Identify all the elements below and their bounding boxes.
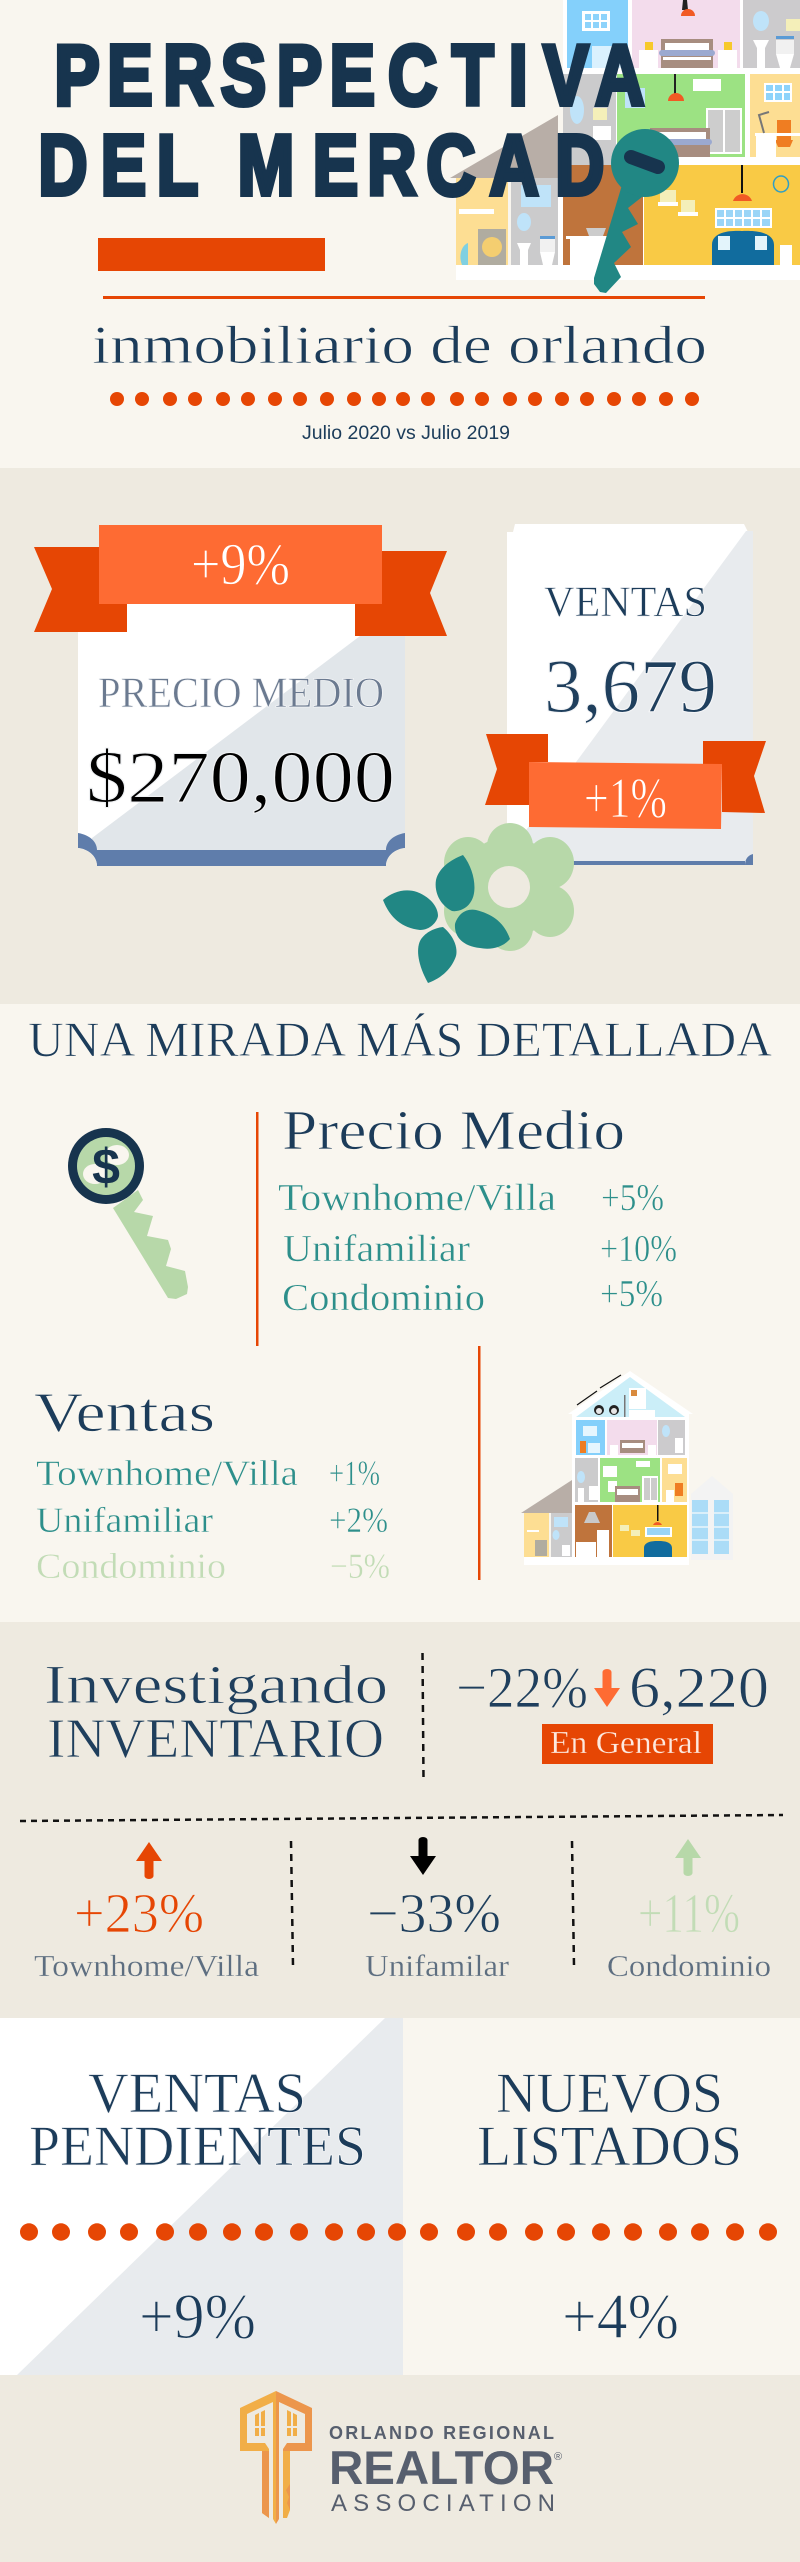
divider: ventas (478, 1346, 480, 1580)
value: 3,679: 3,679 (544, 645, 717, 729)
illustration: small house (521, 1371, 733, 1565)
text: registered mark: ® (554, 2451, 562, 2463)
label: ventas: VENTAS (544, 579, 707, 626)
row: condominio (36, 1546, 390, 1586)
label: Unifamilar (365, 1948, 510, 1983)
subheading: precio medio: Precio Medio (282, 1100, 625, 1162)
value: 6,220: 6,220 (629, 1655, 769, 1720)
row: condominio: Condominio (36, 1546, 226, 1586)
title line 1: PERSPECTIVA (54, 28, 644, 123)
text: realtor: REALTOR (329, 2441, 554, 2494)
icon: flower with leaves (383, 823, 574, 983)
row: condominio (282, 1273, 663, 1319)
title line 2: DEL MERCAD (38, 118, 604, 213)
ribbon: +9% (34, 525, 447, 636)
icon: teal key (594, 129, 679, 293)
row: unifamiliar: +10% (600, 1228, 677, 1270)
logo: orlando regional realtor association (240, 2391, 562, 2524)
row: condominio: −5% (330, 1546, 390, 1586)
label: Condominio (607, 1948, 771, 1983)
label: precio medio: PRECIO MEDIO (98, 670, 384, 717)
heading (477, 2062, 742, 2178)
arrow: up green (675, 1839, 701, 1876)
row: unifamiliar (36, 1500, 388, 1540)
text: orlando regional: ORLANDO REGIONAL (329, 2423, 554, 2443)
value: -22%: −22% (456, 1655, 588, 1720)
heading: investigando inventario: Investigando (44, 1654, 388, 1715)
row: condominio: +5% (600, 1273, 663, 1315)
row: unifamiliar: Unifamiliar (283, 1228, 470, 1270)
row: townhome: +1% (329, 1453, 380, 1493)
arrow: up orange (136, 1842, 162, 1879)
label: Townhome/Villa (34, 1948, 259, 1983)
row: unifamiliar (283, 1228, 677, 1270)
stat: townhome/villa (34, 1842, 259, 1983)
panel: ventas card (485, 524, 766, 865)
illustration: house cross-section (450, 0, 800, 280)
ribbon: +1%: +1% (584, 767, 667, 830)
heading: PENDIENTES (29, 2115, 366, 2178)
stat: unifamilar (365, 1837, 510, 1983)
divider: dashed horizontal (20, 1815, 783, 1821)
value: +11%: +11% (638, 1883, 740, 1945)
panel: nuevos listados (403, 2018, 800, 2375)
title (38, 28, 644, 213)
heading: una mirada más detallada: UNA MIRADA MÁS DETALLADA (28, 1011, 772, 1067)
heading: LISTADOS (477, 2115, 742, 2178)
value: +23%: +23% (74, 1883, 204, 1945)
subtitle rule (103, 296, 705, 299)
row: unifamiliar: Unifamiliar (36, 1500, 213, 1540)
divider: dashed vertical (422, 1653, 424, 1779)
divider: precio medio (256, 1112, 258, 1346)
value: $270,000: $270,000 (86, 737, 395, 819)
ribbon: +9%: +9% (191, 531, 290, 597)
panel: ventas breakdown (34, 1382, 390, 1586)
arrow: down orange (594, 1669, 620, 1707)
icon: dollar key (68, 1128, 188, 1299)
dotted divider (20, 2223, 777, 2241)
subtitle: inmobiliario de orlando (92, 315, 707, 375)
orange bar (98, 238, 325, 271)
value: +9%: +9% (139, 2281, 256, 2353)
ribbon: +1% (485, 734, 766, 830)
row: townhome: Townhome/Villa (36, 1453, 298, 1493)
value: +4%: +4% (562, 2281, 679, 2353)
stat: overall inventory (456, 1655, 769, 1764)
heading: investigando inventario (44, 1654, 388, 1770)
heading: NUEVOS (496, 2062, 723, 2125)
subheading: ventas: Ventas (34, 1382, 215, 1444)
divider: dashed vertical 2 (291, 1841, 293, 1966)
panel: precio medio card (34, 525, 447, 866)
icon: dollar key: $ (92, 1139, 120, 1195)
date text: Julio 2020 vs Julio 2019 (302, 423, 510, 444)
row: unifamiliar: +2% (329, 1500, 388, 1540)
text: association: ASSOCIATION (331, 2490, 555, 2517)
heading: VENTAS (88, 2062, 306, 2125)
badge: en general: En General (550, 1724, 702, 1760)
dotted divider (110, 392, 699, 406)
row: condominio: Condominio (282, 1277, 485, 1319)
heading (29, 2062, 366, 2178)
panel: ventas pendientes (0, 2018, 403, 2375)
row: townhome: Townhome/Villa (278, 1177, 556, 1219)
row: townhome (278, 1177, 664, 1219)
arrow: down black (410, 1837, 436, 1875)
divider: dashed vertical 3 (572, 1841, 574, 1966)
heading: investigando inventario: INVENTARIO (47, 1708, 384, 1770)
panel: precio medio breakdown (278, 1100, 677, 1319)
icon: house key (240, 2391, 312, 2524)
row: townhome: +5% (601, 1177, 664, 1219)
stat: condominio (607, 1839, 771, 1983)
value: -33%: −33% (367, 1883, 501, 1945)
